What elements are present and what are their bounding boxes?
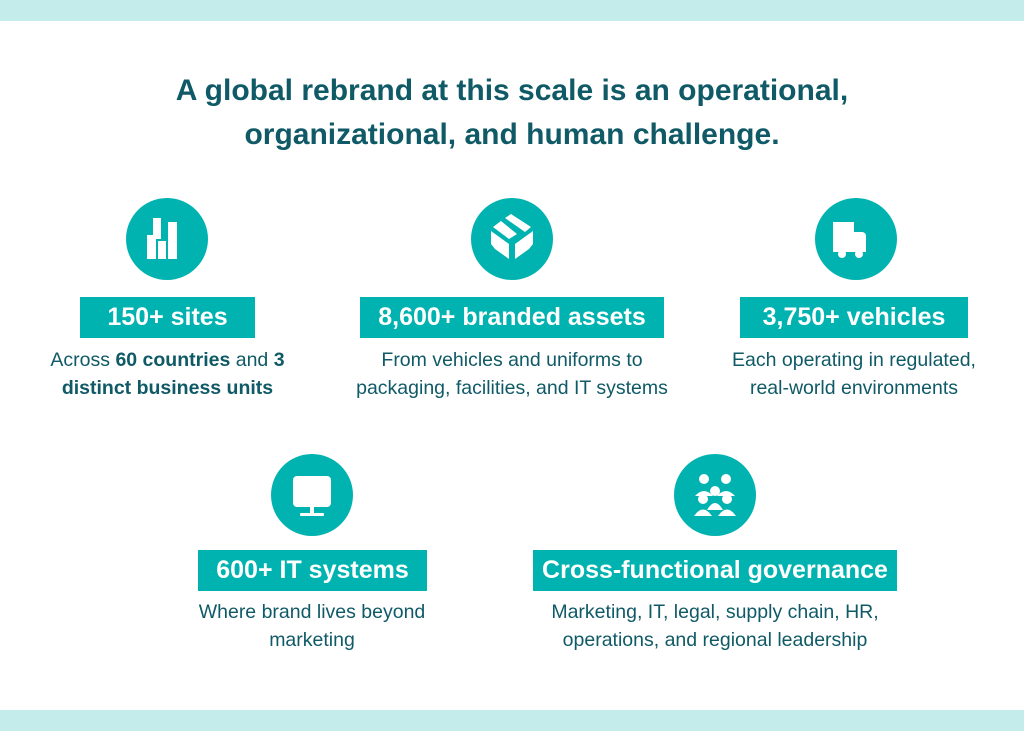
desc: assets: From vehicles and uniforms to [381, 349, 643, 371]
label: IT systems: 600+ IT systems [216, 556, 409, 584]
desc: sites: distinct business units [62, 377, 273, 399]
label: vehicles: 3,750+ vehicles [763, 303, 945, 331]
label: governance [533, 550, 897, 591]
icon: truck [815, 198, 897, 280]
desc: vehicles: real-world environments [750, 377, 958, 399]
label: vehicles [740, 297, 968, 338]
label: IT systems [198, 550, 427, 591]
label: 150+ sites: 150+ sites [107, 303, 228, 331]
desc: assets: packaging, facilities, and IT systems [356, 377, 668, 399]
icon: people [674, 454, 756, 536]
desc: sites: Across 60 countries and 3 [50, 349, 285, 371]
label: branded assets [360, 297, 664, 338]
desc: vehicles: Each operating in regulated, [732, 349, 976, 371]
title [176, 74, 848, 151]
desc: IT [198, 601, 425, 651]
icon: buildings [126, 198, 208, 280]
label: branded assets: 8,600+ branded assets [378, 303, 646, 331]
icon: monitor [271, 454, 353, 536]
icon: box [471, 198, 553, 280]
desc: governance: Marketing, IT, legal, supply chain, HR, [551, 601, 879, 623]
desc: IT: marketing [269, 629, 355, 651]
desc: sites [50, 349, 285, 399]
label: 150+ sites [80, 297, 255, 338]
desc: vehicles [732, 349, 976, 399]
desc: assets [356, 349, 668, 399]
title: A global rebrand at this scale is an operational, [176, 74, 848, 107]
label: governance: Cross-functional governance [542, 556, 888, 584]
title: organizational, and human challenge. [244, 118, 780, 151]
desc: governance: operations, and regional leadership [563, 629, 867, 651]
desc: governance [551, 601, 879, 651]
desc: IT: Where brand lives beyond [199, 601, 425, 623]
